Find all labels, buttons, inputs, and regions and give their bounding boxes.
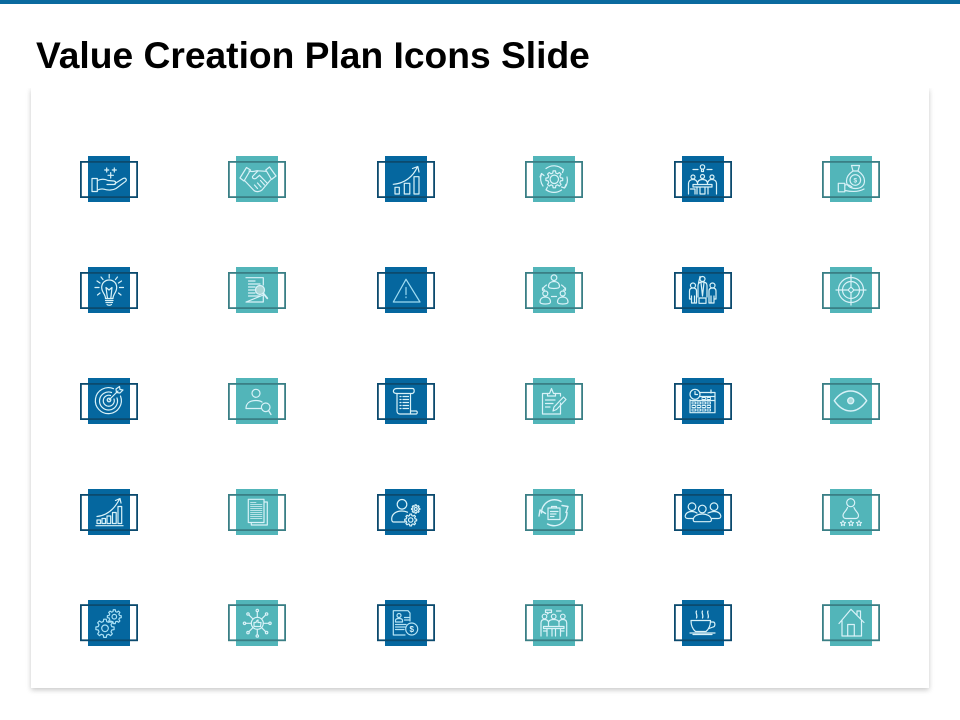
icon: light bulb xyxy=(95,274,124,305)
tile: rising bars xyxy=(81,489,137,535)
tile: warning triangle xyxy=(378,267,434,313)
tile: money bag on hand xyxy=(823,156,879,202)
tile: hand with plus signs xyxy=(81,156,137,202)
tile: growth chart with arrow xyxy=(378,156,434,202)
tile: team at table xyxy=(526,600,582,646)
icon: rising bar chart xyxy=(96,498,123,526)
tile: document with magnifier xyxy=(229,267,285,313)
icon: business team with raised arm xyxy=(690,276,716,303)
tile: eye xyxy=(823,378,879,424)
tile: user with gears xyxy=(378,489,434,535)
icon: two gears xyxy=(96,610,121,637)
icon: user with gears xyxy=(392,500,420,526)
tile: profile document with coin xyxy=(378,600,434,646)
tile: calendar with clock xyxy=(675,378,731,424)
tile: gear with circular arrows xyxy=(526,156,582,202)
icon: handshake xyxy=(240,167,276,192)
icon: bar chart with rising arrow xyxy=(393,166,419,194)
icon: stacked documents xyxy=(248,499,267,525)
icon: warning triangle xyxy=(393,279,420,302)
icon: target with arrow xyxy=(95,386,123,414)
tile: rated person xyxy=(823,489,879,535)
icon: document with magnifier xyxy=(246,278,267,302)
tile: cycle with clipboard xyxy=(526,489,582,535)
tile: crosshair xyxy=(823,267,879,313)
icon: house xyxy=(839,609,864,636)
icon: profile document with dollar coin: $ xyxy=(409,625,414,634)
title: Value Creation Plan Icons Slide xyxy=(36,34,590,76)
tile: coffee cup xyxy=(675,600,731,646)
panel: icon grid card xyxy=(31,88,929,688)
tile: house xyxy=(823,600,879,646)
icon: scroll with list xyxy=(393,388,417,414)
icon: person with three stars xyxy=(840,499,862,526)
tile: clipboard with pencil xyxy=(526,378,582,424)
tile: stacked documents xyxy=(229,489,285,535)
top accent bar xyxy=(0,0,960,4)
icon: crosshair xyxy=(836,275,866,305)
tile: handshake xyxy=(229,156,285,202)
icon: three people xyxy=(685,503,721,522)
icon: team meeting with idea bulb xyxy=(688,165,716,194)
tile: meeting table with idea bulb xyxy=(675,156,731,202)
icon: refresh arrows around clipboard xyxy=(539,500,568,526)
tile: light bulb xyxy=(81,267,137,313)
icon: user with magnifier xyxy=(246,389,271,414)
icon: hand with plus signs xyxy=(92,168,126,192)
tile: target with arrow xyxy=(81,378,137,424)
icon: eye xyxy=(834,391,867,411)
icon: three people connected by arrows xyxy=(540,275,568,304)
tile: scroll list xyxy=(378,378,434,424)
icon: thumbs-up network hub xyxy=(243,609,271,637)
tile: business team xyxy=(675,267,731,313)
tile: two gears xyxy=(81,600,137,646)
icon: steaming coffee cup xyxy=(690,611,715,634)
icon: team at table with speech bubble xyxy=(541,610,567,636)
icon: money bag on hand: $ xyxy=(853,177,857,184)
icon: clipboard with pencil xyxy=(542,388,566,414)
tile: user search xyxy=(229,378,285,424)
tile: team circulation xyxy=(526,267,582,313)
icon: gear with circular arrows xyxy=(540,166,567,192)
tile: thumbs-up network xyxy=(229,600,285,646)
tile: group of people xyxy=(675,489,731,535)
icon: calendar with clock xyxy=(690,389,715,413)
